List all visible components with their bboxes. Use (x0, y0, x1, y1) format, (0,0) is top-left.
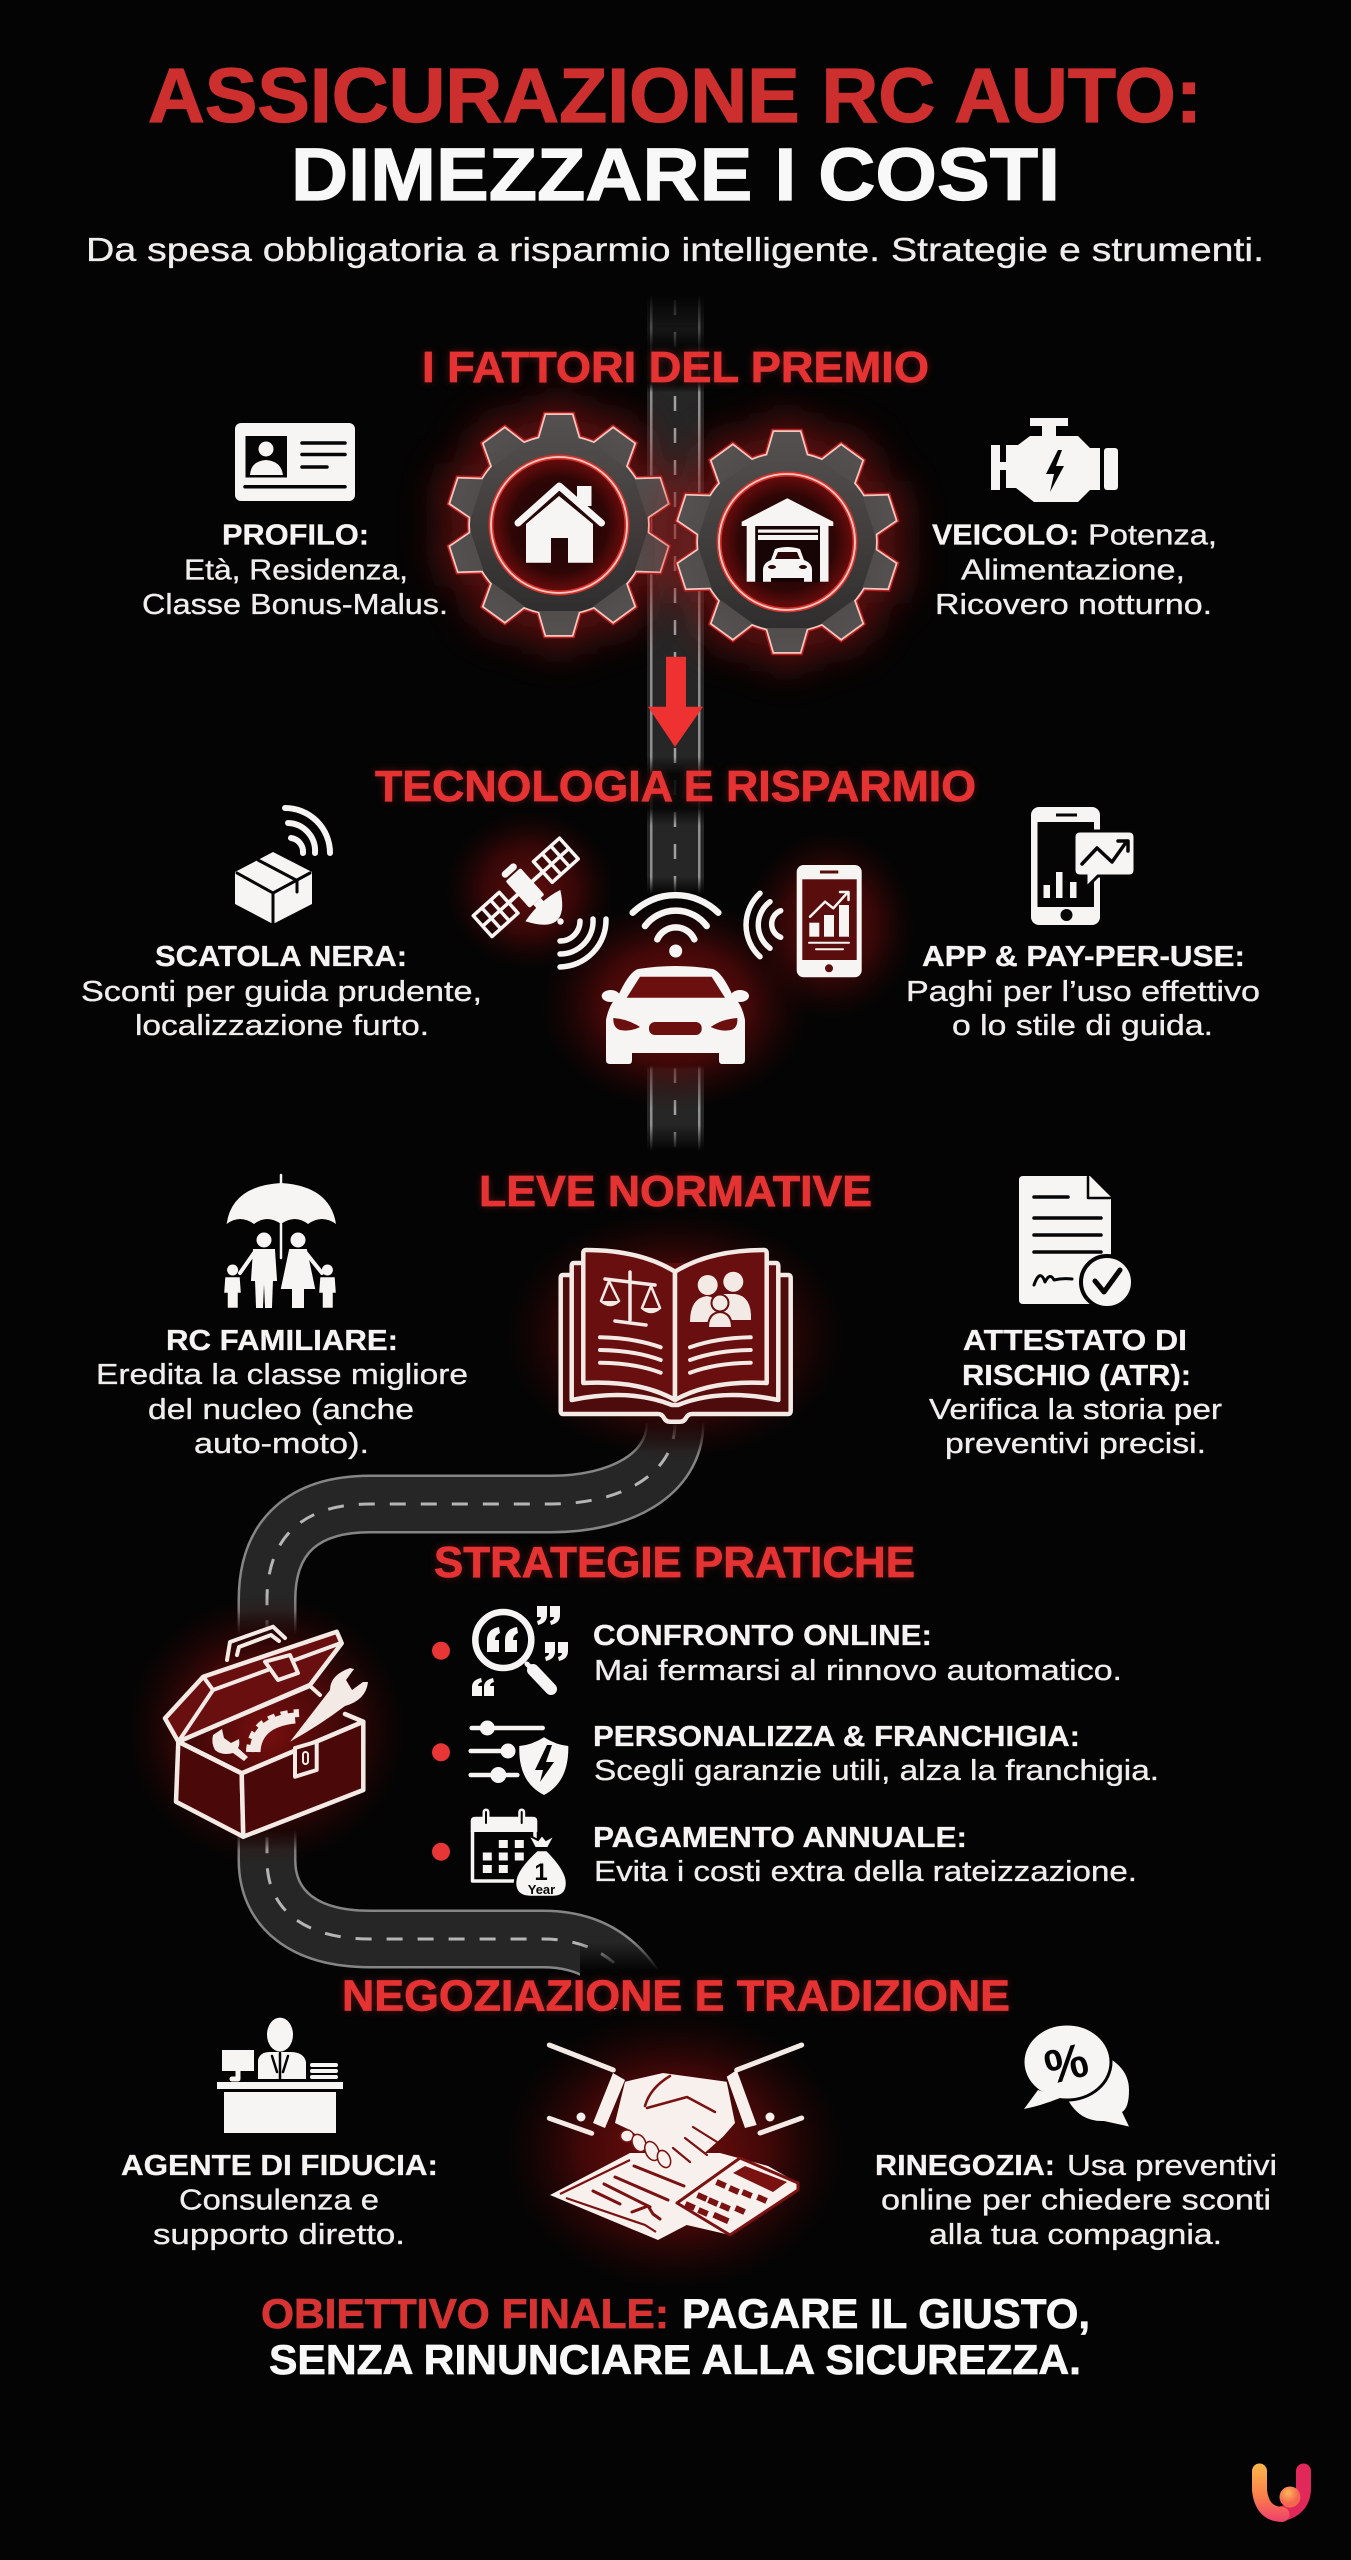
text: profilo (142, 520, 448, 621)
text: app pay-per-use: APP & PAY-PER-USE: (922, 941, 1245, 973)
text: scatola nera: SCATOLA NERA: (155, 941, 407, 973)
text: scatola nera: Sconti per guida prudente, (81, 976, 482, 1008)
text: rc familiare: Eredita la classe migliore (96, 1359, 468, 1391)
icon: calendar with money bag: Year (528, 1882, 555, 1897)
text: agente di fiducia: Consulenza e (179, 2184, 379, 2216)
text: rc familiare (96, 1325, 468, 1460)
text: attestato di rischio: preventivi precisi. (945, 1428, 1206, 1460)
panel: tecnologia e risparmio (81, 762, 1260, 1110)
icon: black box (235, 808, 330, 924)
text: app pay-per-use: Paghi per l’uso effettivo (906, 976, 1260, 1008)
arrow: red down arrow (648, 657, 703, 747)
subtitle: Da spesa obbligatoria a risparmio intelligente. Strategie e strumenti. (86, 231, 1264, 268)
icon: logo (1260, 2471, 1304, 2514)
icon: umbrella and family (225, 1175, 336, 1307)
text: confronto online (593, 1620, 1122, 1687)
icon: handshake with document and calculator (505, 2010, 845, 2290)
text: app pay-per-use: o lo stile di guida. (952, 1010, 1213, 1042)
heading: leve normative: LEVE NORMATIVE (479, 1167, 872, 1216)
icon: percent speech bubbles (1023, 2024, 1129, 2126)
text: profilo: PROFILO: (222, 520, 369, 552)
icon: id card (235, 423, 355, 501)
icon: app phone with chat (1031, 807, 1135, 925)
text: rc familiare: RC FAMILIARE: (166, 1325, 398, 1357)
icon: signal waves (746, 893, 781, 957)
text: pagamento annuale: Evita i costi extra della rateizzazione. (594, 1856, 1137, 1888)
text: personalizza e franchigia (593, 1721, 1159, 1787)
text: scatola nera: localizzazione furto. (135, 1010, 429, 1042)
icon: magnifier with quotes (472, 1606, 568, 1696)
text: attestato di rischio: RISCHIO (ATR): (962, 1360, 1191, 1392)
text: agente di fiducia (121, 2150, 438, 2251)
icon: open law book (505, 1210, 845, 1460)
text: scatola nera (81, 941, 482, 1042)
text: confronto online: Mai fermarsi al rinnovo automatico. (594, 1655, 1122, 1687)
text: personalizza e franchigia: PERSONALIZZA & FRANCHIGIA: (593, 1721, 1080, 1753)
panel: leve normative (96, 1167, 1222, 1460)
text: pagamento annuale: PAGAMENTO ANNUALE: (593, 1822, 967, 1854)
text: attestato di rischio (929, 1325, 1222, 1460)
icon: agent at desk (217, 2018, 343, 2133)
glow: car and devices (445, 810, 915, 1110)
panel: negoziazione e tradizione (121, 1972, 1277, 2290)
text: rinegozia (875, 2150, 1277, 2251)
panel: strategie pratiche (126, 1538, 1159, 1897)
text: agente di fiducia: AGENTE DI FIDUCIA: (121, 2150, 438, 2182)
icon: satellite (465, 828, 606, 967)
heading: strategie pratiche: STRATEGIE PRATICHE (434, 1538, 915, 1587)
text: personalizza e franchigia: Scegli garanzie utili, alza la franchigia. (594, 1755, 1159, 1787)
text: profilo: Classe Bonus-Malus. (142, 589, 448, 621)
text: rc familiare: auto-moto). (194, 1428, 369, 1460)
text: app pay-per-use (906, 941, 1260, 1042)
title: DIMEZZARE I COSTI (291, 133, 1060, 216)
icon: wifi (633, 895, 718, 958)
heading: tecnologia e risparmio: TECNOLOGIA E RISPARMIO (375, 762, 976, 811)
text: confronto online: CONFRONTO ONLINE: (593, 1620, 932, 1652)
text: rinegozia: online per chiedere sconti (881, 2184, 1271, 2216)
icon: gear with house (448, 415, 670, 635)
panel: i fattori del premio (142, 343, 1217, 652)
icon: toolbox (126, 1595, 406, 1865)
text: veicolo: Ricovero notturno. (935, 589, 1212, 621)
callout: obiettivo finale: PAGARE IL GIUSTO, (682, 2290, 1090, 2337)
text: attestato di rischio: Verifica la storia per (929, 1394, 1222, 1426)
text: agente di fiducia: supporto diretto. (153, 2219, 405, 2251)
text: veicolo (932, 520, 1217, 621)
title (148, 53, 1202, 216)
text: rinegozia: Usa preventivi (1067, 2150, 1277, 2182)
icon: percent speech bubbles: % (1040, 2034, 1094, 2095)
icon: car (602, 966, 749, 1064)
callout: obiettivo finale: OBIETTIVO FINALE: (261, 2290, 669, 2337)
text: profilo: Età, Residenza, (184, 554, 408, 586)
title: ASSICURAZIONE RC AUTO: (148, 53, 1202, 139)
bullet dots (432, 1642, 450, 1861)
text: rinegozia: alla tua compagnia. (929, 2219, 1222, 2251)
text: veicolo: Potenza, (1088, 520, 1217, 552)
icon: sliders and shield (471, 1720, 568, 1795)
text: rinegozia: RINEGOZIA: (875, 2150, 1055, 2182)
curved road (225, 1420, 730, 2008)
text: veicolo: VEICOLO: (932, 520, 1079, 552)
callout: obiettivo finale (261, 2290, 1090, 2383)
heading: negoziazione e tradizione: NEGOZIAZIONE E TRADIZIONE (342, 1972, 1010, 2020)
text: attestato di rischio: ATTESTATO DI (963, 1325, 1187, 1357)
text: veicolo: Alimentazione, (961, 554, 1185, 586)
icon: calendar with money bag (471, 1812, 567, 1897)
icon: document with check (1019, 1176, 1133, 1308)
icon: phone with chart (797, 865, 862, 977)
icon: calendar with money bag: 1 (534, 1859, 548, 1886)
callout: obiettivo finale: SENZA RINUNCIARE ALLA SICUREZZA. (269, 2336, 1081, 2383)
icon: house (518, 486, 602, 563)
text: pagamento annuale (593, 1822, 1137, 1888)
vertical road (647, 294, 704, 1151)
icon: gear with garage (676, 432, 898, 652)
icon: engine (991, 418, 1118, 502)
heading: i fattori del premio: I FATTORI DEL PREMIO (422, 343, 929, 392)
icon: garage (742, 498, 833, 582)
text: rc familiare: del nucleo (anche (148, 1394, 414, 1426)
